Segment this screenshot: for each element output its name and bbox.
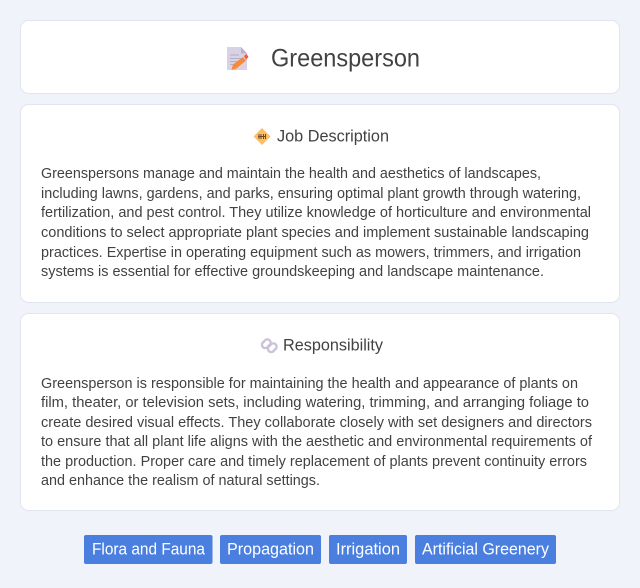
tag: Propagation bbox=[220, 535, 321, 564]
text block: job description: practices. Expertise in operating equipment such as mowers, trimmers, and irrigation bbox=[41, 245, 581, 261]
text block: job description: systems is essential for effective groundskeeping and landscape maintenance. bbox=[41, 264, 544, 280]
tag: Artificial Greenery: Artificial Greenery bbox=[422, 540, 550, 558]
heading: job description: Job Description bbox=[277, 128, 389, 146]
tag: Irrigation: Irrigation bbox=[336, 540, 400, 558]
text block: job description: including lawns, gardens, and parks, ensuring optimal plant growth through watering, bbox=[41, 186, 581, 202]
heading: responsibility: Responsibility bbox=[283, 336, 384, 354]
tag: Flora and Fauna bbox=[84, 535, 212, 564]
text block: job description bbox=[41, 166, 591, 280]
tag: Artificial Greenery bbox=[415, 535, 556, 564]
icon: diamond sign bbox=[254, 128, 270, 145]
tag: Irrigation bbox=[329, 535, 407, 564]
text block: responsibility bbox=[41, 376, 593, 489]
text block: job description: Greenspersons manage and maintain the health and aesthetics of landscapes, bbox=[41, 166, 541, 182]
text block: responsibility: to ensure that all plant life aligns with the aesthetic and environmental requirements of bbox=[41, 434, 593, 450]
text block: responsibility: Greensperson is responsible for maintaining the health and appearance of plants on bbox=[41, 376, 578, 392]
text block: responsibility: and enhance the realism of natural settings. bbox=[41, 473, 320, 489]
panel: responsibility bbox=[20, 314, 620, 510]
tag: Flora and Fauna: Flora and Fauna bbox=[92, 540, 206, 558]
text block: job description: conditions to select appropriate plant species and implement sustainable landscaping bbox=[41, 225, 589, 241]
tag: Propagation: Propagation bbox=[227, 540, 314, 558]
text block: job description: fertilization, and pest control. They utilize knowledge of horticulture and environmental bbox=[41, 205, 591, 221]
panel: job description bbox=[20, 104, 620, 302]
text block: responsibility: film, theater, or television sets, including watering, trimming, and arranging foliage to bbox=[41, 395, 589, 411]
text block: responsibility: the production. Proper care and timely replacement of plants prevent continuity errors bbox=[41, 454, 587, 470]
text block: responsibility: create desired visual effects. They collaborate closely with set designers and directors bbox=[41, 415, 592, 431]
panel: title bbox=[20, 20, 620, 94]
icon: chain link bbox=[261, 338, 278, 353]
icon: document with pencil bbox=[227, 47, 248, 70]
title text: Greensperson bbox=[271, 44, 420, 72]
